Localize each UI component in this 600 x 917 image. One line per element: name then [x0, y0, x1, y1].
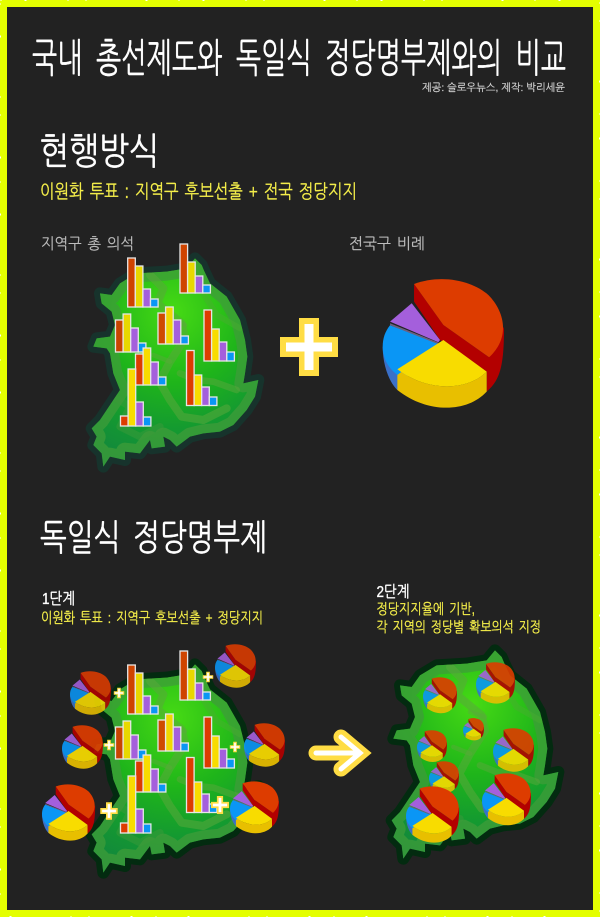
arrow [316, 737, 360, 769]
step 2 description: 정당지지율에 기반, [376, 601, 475, 618]
step 2 label: 2단계 [376, 583, 410, 601]
map: current system [92, 258, 258, 467]
step 1 description: 이원화 투표 : 지역구 후보선출 + 정당지지 [41, 610, 263, 627]
pies: step 1 [42, 644, 285, 841]
bar charts: step 1 [116, 651, 234, 833]
heading: current system: 현행방식 [39, 131, 159, 172]
pie chart: national proportional [383, 279, 504, 408]
label: district seats: 지역구 총 의석 [41, 235, 134, 253]
map: step 2 [392, 650, 558, 859]
credit line: 제공: 슬로우뉴스, 제작: 박리세윤 [422, 82, 565, 94]
plus signs: step 1 [100, 672, 240, 820]
subheading: current system: 이원화 투표 : 지역구 후보선출 + 전국 정당지지 [40, 182, 357, 203]
step 1 map with bars, pies and plus signs [42, 644, 285, 873]
icon: plus [280, 318, 338, 376]
pies: step 2 [406, 662, 534, 843]
step 1 label: 1단계 [42, 590, 75, 608]
step 2 description [376, 601, 541, 636]
bar charts: district seats [116, 244, 234, 426]
label: national proportional: 전국구 비례 [349, 236, 425, 253]
map: step 1 [92, 664, 258, 873]
heading: German system: 독일식 정당명부제 [40, 517, 267, 558]
step 2 description: 각 지역의 정당별 확보의석 지정 [376, 619, 541, 636]
map of Korea with bar charts [92, 244, 258, 467]
step 2 map with pies [392, 650, 558, 859]
